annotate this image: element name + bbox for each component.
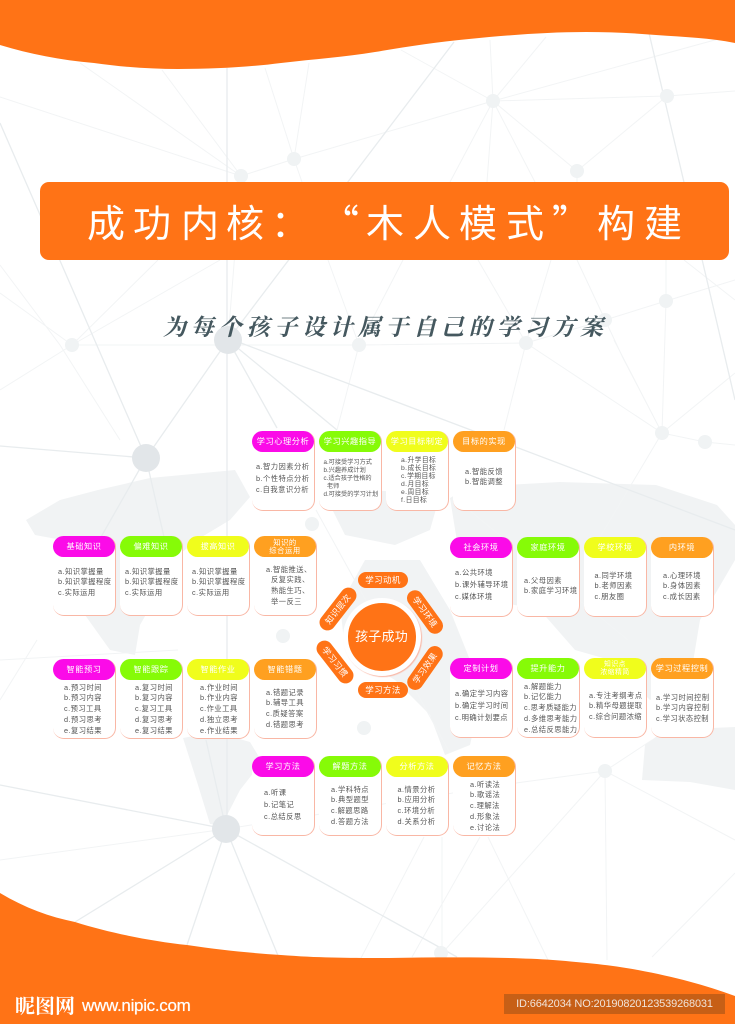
card: 社会环境: a.公共环境 b.课外辅导环境 c.媒体环境 xyxy=(455,568,508,601)
card: 智能跟踪: a.复习时间 b.复习内容 c.复习工具 d.复习思考 e.复习结果 xyxy=(135,683,173,735)
node: 学习方法: 学习方法 xyxy=(365,685,401,695)
card: 学习方法: a.听课 b.记笔记 c.总结反思 xyxy=(264,788,302,821)
title banner: 建 xyxy=(644,193,682,248)
card: 偏难知识: a.知识掌握量 b.知识掌握程度 c.实际运用 xyxy=(125,567,178,597)
card: 基础知识: 基础知识 xyxy=(67,542,101,551)
node: 学习效果: 学习效果 xyxy=(411,651,439,685)
card: 学习目标制定 xyxy=(386,431,449,511)
card: 基础知识: a.知识掌握量 b.知识掌握程度 c.实际运用 xyxy=(58,567,111,597)
watermark id box xyxy=(504,994,725,1014)
node: 学习环境 xyxy=(404,587,446,637)
card: 知识点浓缩精简: 浓缩精简 xyxy=(600,668,630,676)
card: 拔高知识: a.知识掌握量 b.知识掌握程度 c.实际运用 xyxy=(192,567,245,597)
title banner: 模 xyxy=(459,193,497,248)
title banner: 核 xyxy=(226,193,264,248)
node: 知识层次 xyxy=(316,584,360,634)
card: 内环境: 内环境 xyxy=(669,543,695,552)
card: 学校环境: 学校环境 xyxy=(598,543,632,552)
card: 知识的综合运用: 知识的 xyxy=(273,538,297,546)
card: 学习兴趣指导: 学习兴趣指导 xyxy=(324,437,376,446)
card: 社会环境: 社会环境 xyxy=(464,543,498,552)
card: 智能作业: 智能作业 xyxy=(201,665,235,674)
node: 学习效果 xyxy=(404,643,446,693)
card: 学习心理分析: 学习心理分析 xyxy=(257,437,309,446)
card: 家庭环境 xyxy=(517,537,580,617)
center diagram: 孩子成功 xyxy=(316,572,443,698)
card: 分析方法 xyxy=(386,756,449,836)
card: 智能作业: a.作业时间 b.作业内容 c.作业工具 d.独立思考 e.作业结果 xyxy=(200,683,238,735)
subtitle: 为每个孩子设计属于自己的学习方案 xyxy=(163,309,608,342)
card: 学习方法 xyxy=(252,756,315,836)
card: 社会环境 xyxy=(450,537,513,617)
card: 解题方法 xyxy=(319,756,382,836)
card: 目标的实现: a.智能反馈 b.智能调整 xyxy=(465,467,503,486)
panel: knowledge cards xyxy=(53,536,317,616)
card: 偏难知识 xyxy=(120,536,183,616)
panel: smart study cards xyxy=(53,659,317,739)
node: 学习环境: 学习环境 xyxy=(410,595,440,629)
card: 解题方法: a.学科特点 b.典型题型 c.解题思路 d.答题方法 xyxy=(331,785,369,826)
card: 记忆方法 xyxy=(453,756,516,836)
card: 智能预习: 智能预习 xyxy=(67,665,101,674)
watermark logo xyxy=(15,990,191,1019)
card: 提升能力: 提升能力 xyxy=(531,664,565,673)
card: 智能错题: 智能错题 xyxy=(268,665,302,674)
center circle xyxy=(342,598,420,676)
card: 提升能力: a.解题能力 b.记忆能力 c.思考质疑能力 d.多维思考能力 e.总结反思能力 xyxy=(524,682,577,734)
title banner: 人 xyxy=(413,193,451,248)
watermark logo: 昵图网 xyxy=(15,990,75,1019)
card: 内环境: a.心理环境 b.身体因素 c.成长因素 xyxy=(663,571,701,601)
card: 知识的综合运用: a.智能推送、 反复实践、 熟能生巧、 举一反三 xyxy=(266,565,312,606)
card: 学习方法: 学习方法 xyxy=(266,762,300,771)
card: 分析方法: 分析方法 xyxy=(400,762,434,771)
card: 智能跟踪: 智能跟踪 xyxy=(134,665,168,674)
card: 学习心理分析: a.智力因素分析 b.个性特点分析 c.自我意识分析 xyxy=(256,462,309,494)
card: 分析方法: a.情景分析 b.应用分析 c.环境分析 d.关系分析 xyxy=(398,785,435,826)
center circle: 孩子成功 xyxy=(355,629,408,644)
card: 内环境 xyxy=(651,537,714,617)
card: 智能跟踪 xyxy=(120,659,183,739)
card: 家庭环境: a.父母因素 b.家庭学习环境 xyxy=(524,576,577,595)
panel: learning psychology cards xyxy=(252,431,516,511)
watermark logo: www.nipic.com xyxy=(82,996,191,1015)
card: 学习过程控制 xyxy=(651,658,714,738)
card: 知识点浓缩精简: 知识点 xyxy=(604,660,626,668)
title banner: 内 xyxy=(181,193,219,248)
card: 学习过程控制: 学习过程控制 xyxy=(656,664,708,673)
card: 定制计划 xyxy=(450,658,513,738)
card: 基础知识 xyxy=(53,536,116,616)
card: 记忆方法: a.听读法 b.歌谣法 c.理解法 d.形象法 e.讨论法 xyxy=(470,780,500,832)
card: 目标的实现: 目标的实现 xyxy=(462,437,506,446)
card: 学习目标制定: a.升学目标 b.成长目标 c.学期目标 d.月目标 e.周目标 f.日目标 xyxy=(401,457,436,504)
card: 记忆方法: 记忆方法 xyxy=(467,762,501,771)
node: 学习动机: 学习动机 xyxy=(365,575,401,585)
card: 学习目标制定: 学习目标制定 xyxy=(391,437,443,446)
title banner: 构 xyxy=(597,193,635,248)
card: 学习兴趣指导 xyxy=(319,431,382,511)
card: 拔高知识 xyxy=(187,536,250,616)
card: 智能预习: a.预习时间 b.预习内容 c.预习工具 d.预习思考 e.复习结果 xyxy=(64,683,102,735)
node: 学习习惯 xyxy=(313,637,357,687)
card: 知识点浓缩精简: a.专注考纲考点 b.精华母题提取 c.综合问题浓缩 xyxy=(589,691,642,721)
title banner: ” xyxy=(552,193,590,248)
title banner: 成 xyxy=(87,193,125,248)
card: 学习过程控制: a.学习时间控制 b.学习内容控制 c.学习状态控制 xyxy=(656,693,709,723)
card: 定制计划: 定制计划 xyxy=(464,664,498,673)
card: 解题方法: 解题方法 xyxy=(333,762,367,771)
card: 学校环境: a.同学环境 b.老师因素 c.朋友圈 xyxy=(594,571,632,601)
node: 学习动机 xyxy=(358,572,408,588)
card: 智能错题 xyxy=(254,659,317,739)
panel: method cards xyxy=(252,756,516,836)
watermark id box: ID:6642034 NO:20190820123539268031 xyxy=(516,998,713,1010)
card: 智能预习 xyxy=(53,659,116,739)
title banner: 木 xyxy=(366,193,404,248)
card: 知识点浓缩精简 xyxy=(584,658,647,738)
node: 学习方法 xyxy=(358,682,408,698)
card: 家庭环境: 家庭环境 xyxy=(531,543,565,552)
card: 知识的综合运用: 综合运用 xyxy=(269,546,301,554)
card: 学习兴趣指导: a.可接受学习方式 b.兴趣养成计划 c.适合孩子性格的 老师 d.可接受的学习计划 xyxy=(324,459,378,498)
title banner xyxy=(40,182,729,260)
panel: plan and ability cards xyxy=(450,658,714,738)
card: 学校环境 xyxy=(584,537,647,617)
node: 知识层次: 知识层次 xyxy=(323,592,353,626)
panel: environment cards xyxy=(450,537,714,617)
card: 学习心理分析 xyxy=(252,431,315,511)
card: 智能错题: a.错题记录 b.辅导工具 c.质疑答案 d.错题思考 xyxy=(266,688,304,729)
card: 定制计划: a.确定学习内容 b.确定学习时间 c.明确计划要点 xyxy=(455,689,508,722)
title banner: “ xyxy=(321,193,359,248)
card: 知识的综合运用 xyxy=(254,536,317,616)
card: 智能作业 xyxy=(187,659,250,739)
card: 拔高知识: 拔高知识 xyxy=(201,542,235,551)
card: 提升能力 xyxy=(517,658,580,738)
title banner: 功 xyxy=(133,193,171,248)
card: 目标的实现 xyxy=(453,431,516,511)
title banner: ： xyxy=(271,193,309,248)
title banner: 式 xyxy=(506,193,544,248)
card: 偏难知识: 偏难知识 xyxy=(134,542,168,551)
node: 学习习惯: 学习习惯 xyxy=(320,645,350,679)
